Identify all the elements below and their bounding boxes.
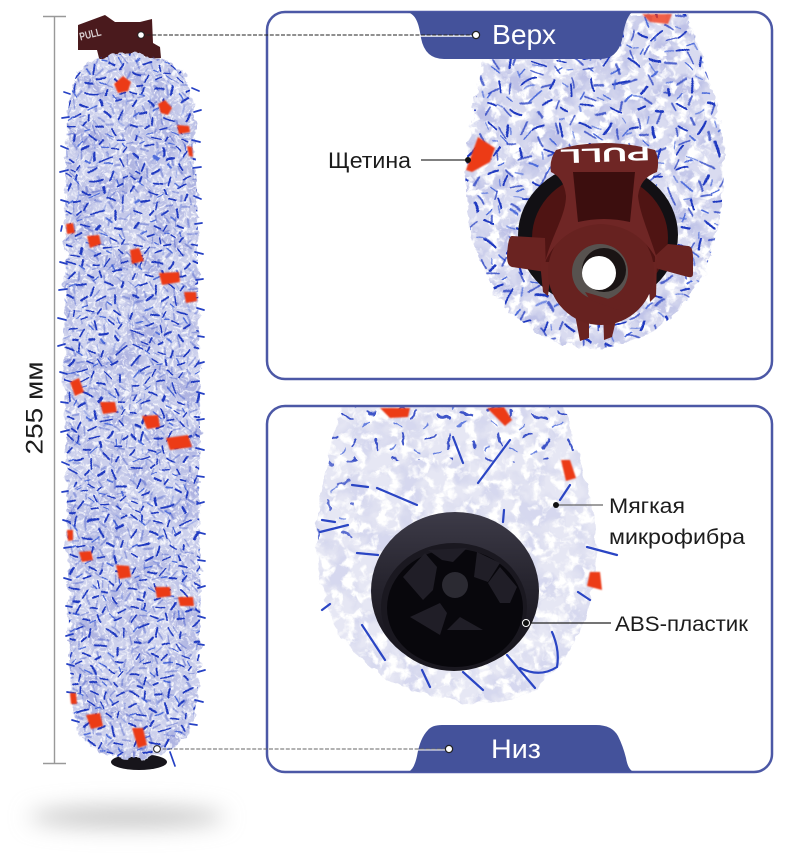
leader line: bottom: [154, 745, 453, 753]
black ABS end wheel: [371, 512, 539, 671]
callout: bristles: [328, 148, 471, 173]
bottom-view red bristles: [380, 407, 602, 590]
callout: soft microfibre: микрофибра: [609, 526, 745, 549]
tab: bottom view: [408, 725, 634, 772]
red bristle tufts on roller: [66, 76, 197, 748]
dimension line: 255 mm: [22, 16, 66, 764]
bottom-view brush photo: [300, 400, 617, 715]
dimension line: 255 mm: 255 мм: [22, 362, 48, 454]
tab label Верх: Верх: [492, 19, 556, 50]
brush end cap: [507, 141, 693, 341]
top-view brush photo: [464, 13, 726, 350]
floor shadow: [29, 807, 225, 827]
tab: top view: [407, 12, 632, 59]
tab label Низ: Низ: [491, 734, 541, 764]
callout: ABS plastic: ABS-пластик: [615, 613, 749, 636]
roller microfibre body: [62, 52, 204, 760]
roller edge fibres: [58, 88, 205, 766]
roller top cap with PULL tab: [78, 15, 161, 62]
panel outline: [267, 406, 772, 772]
roller bottom cap: [111, 754, 167, 770]
callout: soft microfibre: Мягкая: [609, 495, 685, 518]
PULL label on cap: PULL: [560, 141, 650, 167]
leader line: top: [138, 31, 480, 39]
callout: ABS plastic: [522, 613, 749, 636]
product photo: full brush roller: [50, 15, 215, 770]
panel: top view: [267, 5, 772, 379]
callout: bristles: Щетина: [328, 148, 412, 173]
panel outline: [267, 12, 772, 379]
callout: soft microfibre: [553, 495, 745, 549]
top-view red bristles: [466, 14, 672, 172]
bottom-view blue fibres: [320, 437, 617, 690]
panel: bottom view: [267, 400, 772, 772]
roller top cap with PULL tab: PULL: [78, 26, 103, 43]
